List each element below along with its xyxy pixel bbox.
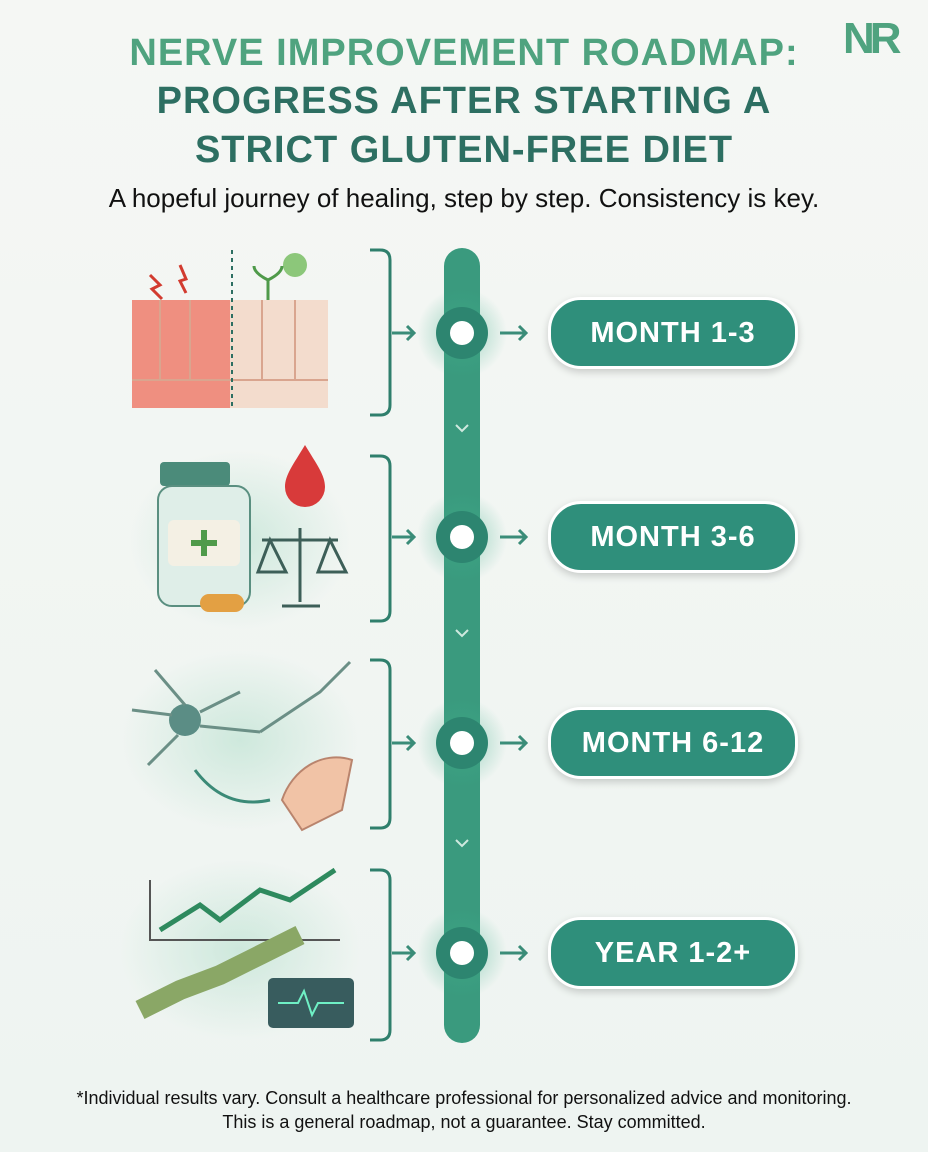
text: NERVE IMPROVEMENT ROADMAP:	[129, 32, 799, 74]
pill: year 1-2+	[548, 917, 798, 989]
text: STRICT GLUTEN-FREE DIET	[195, 129, 733, 171]
icon: neuron and hand	[132, 662, 352, 830]
pill: month 1-3	[548, 297, 798, 369]
text: PROGRESS AFTER STARTING A	[157, 80, 771, 122]
bar	[444, 248, 480, 1043]
logo: NR	[843, 14, 897, 63]
icon: supplement bottle, drop and scale	[158, 445, 346, 612]
title	[129, 32, 799, 171]
pill: month 3-6: MONTH 3-6	[590, 521, 756, 553]
pill: month 6-12: MONTH 6-12	[582, 727, 764, 759]
pill: year 1-2+: YEAR 1-2+	[595, 937, 751, 969]
subtitle: A hopeful journey of healing, step by step. Consistency is key.	[109, 183, 819, 213]
pill: month 6-12	[548, 707, 798, 779]
footer disclaimer	[76, 1088, 852, 1132]
icon: chart and nerve	[140, 870, 354, 1028]
pill: month 3-6	[548, 501, 798, 573]
pill: month 1-3: MONTH 1-3	[590, 317, 756, 349]
icon: gut cells	[132, 250, 328, 410]
footer disclaimer: *Individual results vary. Consult a healthcare professional for personalized advice and monitoring.	[76, 1088, 852, 1108]
footer disclaimer: This is a general roadmap, not a guarantee. Stay committed.	[222, 1112, 706, 1132]
